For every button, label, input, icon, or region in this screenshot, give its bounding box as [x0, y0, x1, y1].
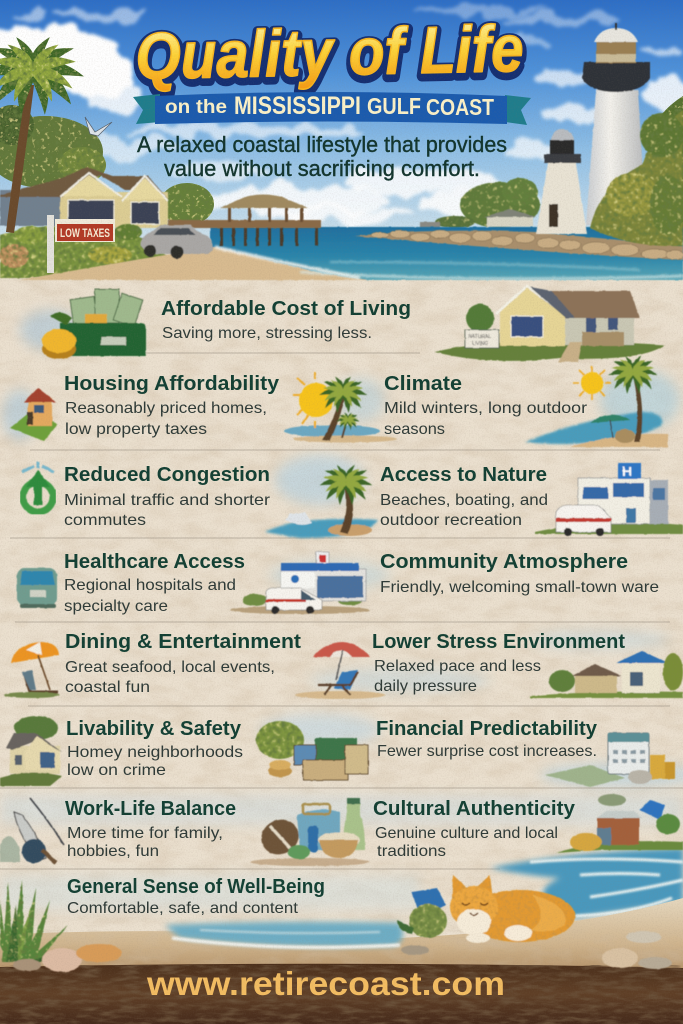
description: Great seafood, local events,: [65, 659, 275, 676]
heading: Housing Affordability: [64, 373, 280, 395]
icon: hospital and ambulance: [230, 552, 370, 614]
description: seasons: [384, 421, 445, 438]
description: hobbies, fun: [67, 843, 159, 860]
subtitle on ribbon: [165, 92, 494, 120]
heading: Community Atmosphere: [380, 551, 628, 573]
row: dining and stress: [4, 631, 683, 699]
icon: homes and gazebo: [530, 651, 683, 698]
description: Friendly, welcoming small-town ware: [380, 579, 659, 596]
website url: www.retirecoast.com: [146, 965, 505, 1002]
description: Homey neighborhoods: [67, 744, 243, 761]
icon: cottage: [0, 716, 62, 786]
heading: Affordable Cost of Living: [161, 298, 411, 320]
icon: money, cash and tree: [256, 721, 368, 780]
row: livability and financial: [0, 716, 675, 787]
heading: Dining & Entertainment: [65, 631, 301, 653]
icon: calendar with bills and coins: [545, 733, 675, 787]
title block: [133, 11, 531, 181]
main title: Quality of Life: [135, 14, 524, 96]
icon: wallet with money: [42, 289, 146, 359]
subtitle on ribbon: MISSISSIPPI: [234, 92, 361, 120]
pier and gazebo: [168, 194, 321, 246]
heading: General Sense of Well-Being: [67, 876, 325, 898]
icon: teal vehicle: [17, 568, 57, 608]
icon: yellow house: LIVING: [472, 341, 489, 347]
hero coastal scene: [0, 0, 683, 280]
description: Mild winters, long outdoor: [384, 400, 588, 417]
big lighthouse: [582, 23, 650, 225]
sea and beach: [20, 227, 683, 280]
icon: yellow house: NATURAL: [468, 334, 491, 340]
earth band: [0, 964, 683, 1024]
seagull: [85, 117, 112, 136]
description: coastal fun: [65, 679, 150, 696]
description: Beaches, boating, and: [380, 492, 548, 509]
bushes: [0, 224, 172, 278]
trees behind house: [0, 105, 214, 225]
small lighthouse: [536, 129, 587, 234]
heading: Financial Predictability: [376, 718, 598, 740]
row: congestion and nature: [22, 462, 683, 538]
description: low on crime: [67, 762, 166, 779]
description: Comfortable, safe, and content: [67, 900, 299, 917]
car: [140, 225, 213, 258]
ribbon banner: [133, 92, 531, 125]
row: affordable cost of living: [42, 286, 665, 362]
stone jetty: [355, 230, 683, 260]
grass clump: [0, 880, 70, 964]
icon: hospital with ambulance: [535, 463, 683, 536]
row: healthcare and community: [17, 551, 659, 615]
description: [384, 400, 588, 438]
tagline: value without sacrificing comfort.: [164, 156, 480, 181]
description: [65, 400, 267, 438]
row: general well-being: [67, 876, 325, 917]
heading: Reduced Congestion: [64, 464, 270, 486]
subtitle on ribbon: GULF: [367, 93, 421, 119]
heading: Work-Life Balance: [65, 798, 236, 820]
icon: sun and palm: [284, 372, 397, 442]
icon: beach grass and shells: [0, 880, 672, 972]
description: [67, 744, 243, 779]
icon: fishing rod and lure: [0, 798, 64, 863]
subtitle on ribbon: on the: [165, 97, 227, 118]
low taxes sign: LOW TAXES: [60, 226, 110, 240]
row: work-life and culture: [0, 794, 683, 866]
description: low property taxes: [65, 421, 207, 438]
palm tree: [0, 34, 84, 233]
tagline: [137, 132, 507, 181]
description: [65, 659, 275, 696]
icon: orange umbrella and chair: [4, 642, 60, 698]
surf lines: [530, 859, 683, 916]
heading: Lower Stress Environment: [372, 631, 625, 653]
icon: palm islet with boat: [265, 463, 378, 538]
description: commutes: [64, 512, 146, 529]
house with gables: [0, 167, 168, 228]
description: Fewer surprise cost increases.: [377, 743, 597, 760]
section dividers: [0, 353, 683, 869]
description: outdoor recreation: [380, 512, 522, 529]
row: housing and climate: [10, 354, 668, 447]
description: Minimal traffic and shorter: [64, 492, 271, 509]
heading: Cultural Authenticity: [373, 798, 576, 820]
icon: umbrella with blue deck chair: [295, 642, 385, 699]
icon: green circular arrow: [22, 462, 54, 512]
beach bag: [397, 888, 447, 938]
right tree mass (behind tower top): [645, 96, 683, 240]
description: [374, 658, 541, 695]
main title: Quality of Life: [135, 11, 524, 93]
heading: Climate: [384, 373, 462, 395]
sand: [0, 898, 683, 975]
description: Relaxed pace and less: [374, 658, 541, 675]
right sea: [490, 848, 683, 918]
description: specialty care: [64, 598, 168, 615]
shells: [13, 931, 672, 972]
icon: food, cooler and bottle: [250, 798, 370, 866]
beach and water footer scene: [0, 848, 683, 1024]
description: daily pressure: [374, 678, 477, 695]
icon: little house on map: [10, 388, 58, 441]
heading: Healthcare Access: [64, 551, 245, 573]
heading: Livability & Safety: [66, 718, 242, 740]
icon: shoreline building: [556, 794, 683, 853]
tagline: A relaxed coastal lifestyle that provides: [137, 132, 507, 157]
description: [375, 825, 558, 860]
description: Saving more, stressing less.: [162, 325, 372, 342]
subtitle on ribbon: COAST: [426, 94, 494, 120]
far shore trees and cottage: [420, 178, 540, 228]
description: [380, 492, 548, 529]
description: [67, 825, 223, 860]
low taxes sign: [47, 215, 115, 273]
icon: sleeping orange cat: [397, 875, 575, 943]
soft watercolor washes: [0, 310, 683, 910]
sky with clouds: [0, 0, 683, 240]
description: Regional hospitals and: [64, 577, 236, 594]
description: More time for family,: [67, 825, 223, 842]
heading: Access to Nature: [380, 464, 547, 486]
description: Genuine culture and local: [375, 825, 558, 842]
icon: beach with sun, palm and umbrella: [525, 354, 668, 447]
cat body: [450, 875, 575, 943]
icon: yellow house: [435, 286, 665, 362]
description: [64, 492, 271, 529]
foreground trees right: [590, 110, 683, 246]
description: traditions: [377, 843, 446, 860]
description: [64, 577, 236, 615]
lower sea: [165, 922, 403, 947]
icon: hospital with ambulance: H: [622, 463, 632, 479]
description: Reasonably priced homes,: [65, 400, 267, 417]
